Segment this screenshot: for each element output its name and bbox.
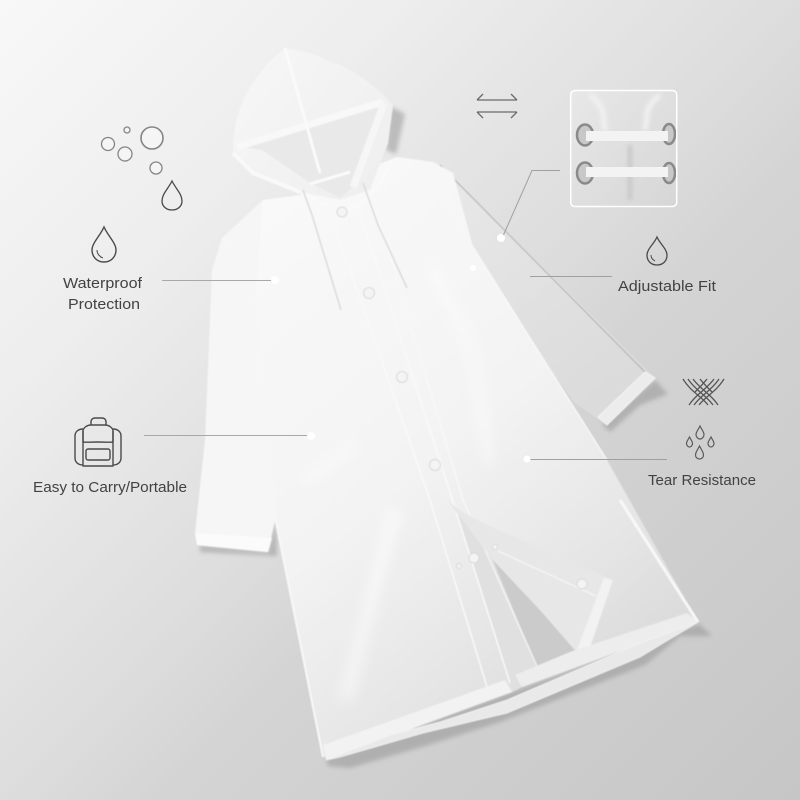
- back hem strip: [326, 622, 698, 760]
- icon: waterproof drop: [92, 227, 116, 262]
- leader: straps callout: [497, 170, 560, 242]
- label: Tear Resistance: Tear Resistance: [648, 472, 756, 489]
- icon: tear resistance drops: [686, 426, 714, 459]
- hood: [233, 48, 393, 212]
- front hem left: [323, 680, 512, 760]
- label: Waterproof Protection: [63, 275, 143, 313]
- body panel: [255, 157, 698, 757]
- small highlight dot: [470, 265, 476, 271]
- icon: adjustable fit drop: [647, 237, 667, 265]
- front placket: [330, 206, 540, 687]
- side seams: [222, 162, 698, 757]
- label: Adjustable Fit: Adjustable Fit: [618, 278, 717, 295]
- opening gap between panels: [493, 560, 582, 668]
- drawstrings: [303, 183, 407, 310]
- leader: adjustable fit: [530, 276, 612, 278]
- front hem right: [515, 613, 698, 687]
- under layer between panels: [455, 508, 537, 687]
- label: Waterproof Protection: Protection: [68, 296, 140, 313]
- icon: adjust arrows: [477, 94, 517, 118]
- coat shadows: [200, 106, 712, 768]
- corner flap: [447, 500, 613, 662]
- icon: water bubbles: [102, 127, 163, 174]
- icon: backpack: [75, 418, 121, 466]
- leader: waterproof: [162, 276, 279, 284]
- leader: tear resistance: [524, 456, 667, 462]
- icon: falling drop: [162, 181, 182, 210]
- inset: adjustable straps photo: [571, 90, 677, 206]
- raincoat: [195, 48, 712, 768]
- label: Easy to Carry/Portable: Easy to Carry/Portable: [33, 479, 187, 496]
- label: Waterproof Protection: Waterproof: [63, 275, 143, 292]
- icon: woven fabric: [683, 379, 724, 405]
- right sleeve: [440, 165, 655, 425]
- buttons: [337, 207, 587, 589]
- leader: easy to carry: [144, 432, 315, 440]
- soft fold highlights: [305, 265, 490, 700]
- left sleeve: [195, 200, 276, 552]
